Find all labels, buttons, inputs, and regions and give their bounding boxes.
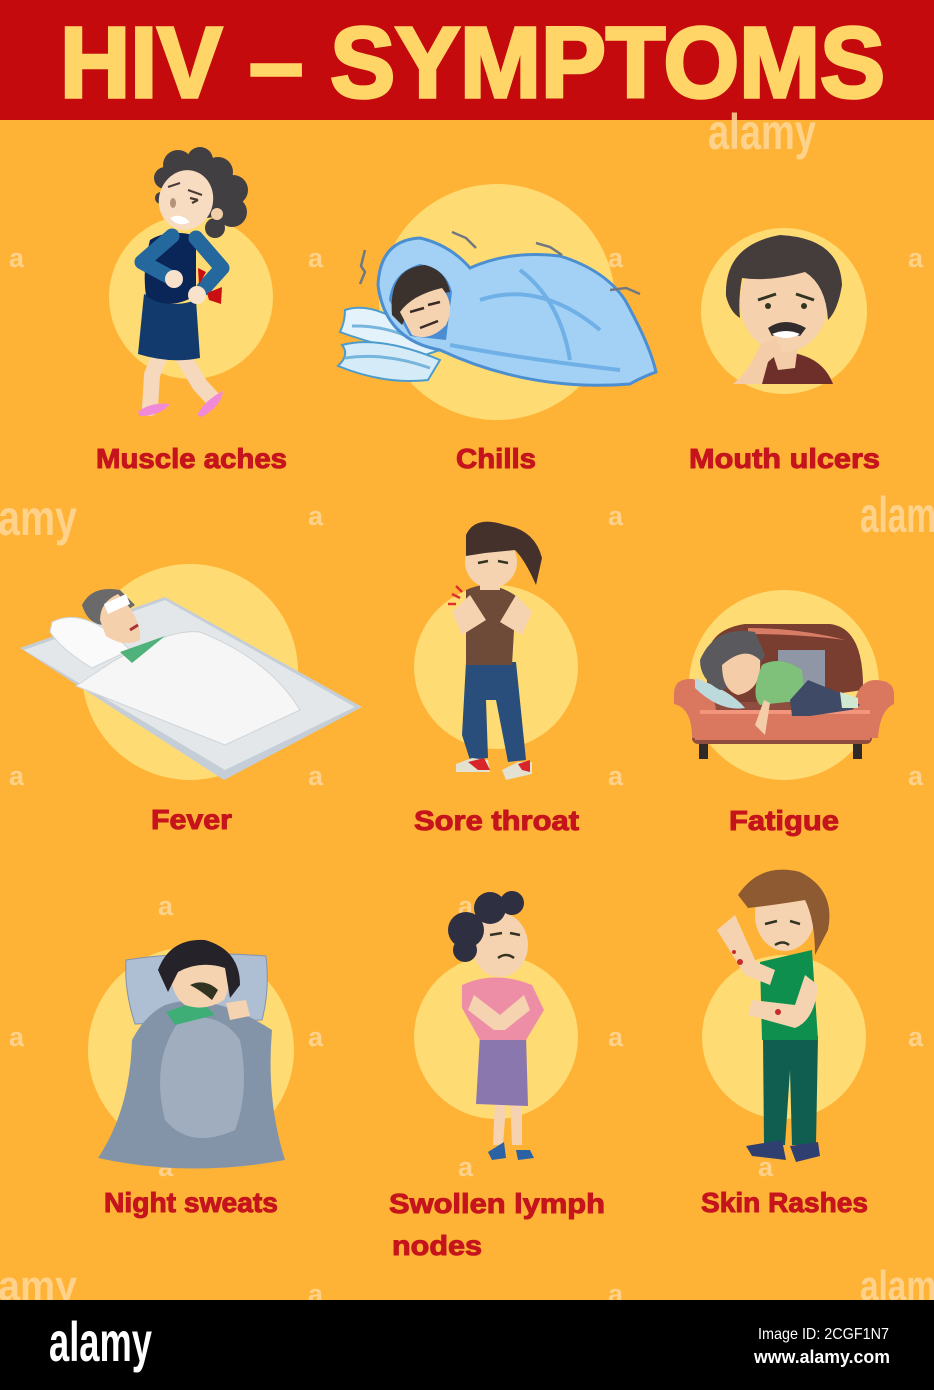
watermark pattern: a [608,761,624,791]
panel: fatigue [674,590,894,836]
watermark pattern: alamy [708,104,816,160]
label line 2: nodes [392,1230,482,1261]
watermark pattern: a [308,501,324,531]
hair [154,147,248,238]
watermark pattern: amy [0,1262,78,1309]
watermark pattern: a [308,1279,324,1309]
panel: fever [20,564,362,835]
watermark pattern: a [308,243,324,273]
watermark pattern: a [908,1022,924,1052]
watermark pattern: a [9,243,25,273]
watermark pattern: a [608,501,624,531]
icon: man with sore throat [448,522,542,780]
watermark pattern: a [758,891,774,921]
panel: sore throat [414,522,579,836]
watermark pattern: a [308,761,324,791]
watermark pattern: amy [0,490,77,546]
watermark pattern: a [9,761,25,791]
label: Muscle aches [96,443,287,474]
panel: skin rashes [701,870,868,1218]
watermark pattern: a [9,1022,25,1052]
label: Skin Rashes [701,1187,868,1218]
watermark pattern: a [608,1279,624,1309]
footer bar [0,1300,934,1390]
watermark pattern: a [908,243,924,273]
panel: mouth ulcers [689,228,880,474]
panel: chills [338,184,656,474]
icon: person sweating in bed [98,940,285,1169]
icon: woman with muscle aches [138,147,248,417]
panel: night sweats [88,940,294,1218]
panel: swollen lymph nodes [389,891,605,1261]
watermark pattern: a [758,1152,774,1182]
header banner [0,0,934,120]
icon: tired man on sofa [674,624,894,759]
label: Fever [151,804,232,835]
icon: person shivering in blanket [338,232,656,385]
label: Swollen lymph [389,1188,605,1219]
watermark pattern: a [458,1152,474,1182]
title: HIV – SYMPTOMS [60,7,885,119]
icon: man with mouth ulcers [726,235,842,384]
icon: woman with swollen lymph nodes [448,891,544,1160]
label: Sore throat [414,805,579,836]
panel: muscle aches [96,147,287,474]
watermark pattern: a [608,243,624,273]
watermark pattern: a [608,1022,624,1052]
watermark pattern: a [458,891,474,921]
watermark pattern: a [158,891,174,921]
image id: Image ID: 2CGF1N7 [758,1326,889,1343]
logo: alamy [49,1310,152,1373]
label: Mouth ulcers [689,443,880,474]
watermark pattern: a [908,761,924,791]
label: Fatigue [729,805,839,836]
icon: patient with fever in bed [20,589,362,780]
label: Chills [456,443,536,474]
watermark pattern: a [308,1022,324,1052]
website: www.alamy.com [753,1347,890,1367]
label: Night sweats [104,1187,278,1218]
watermark pattern: a [158,1152,174,1182]
icon: man with skin rash [717,870,829,1162]
